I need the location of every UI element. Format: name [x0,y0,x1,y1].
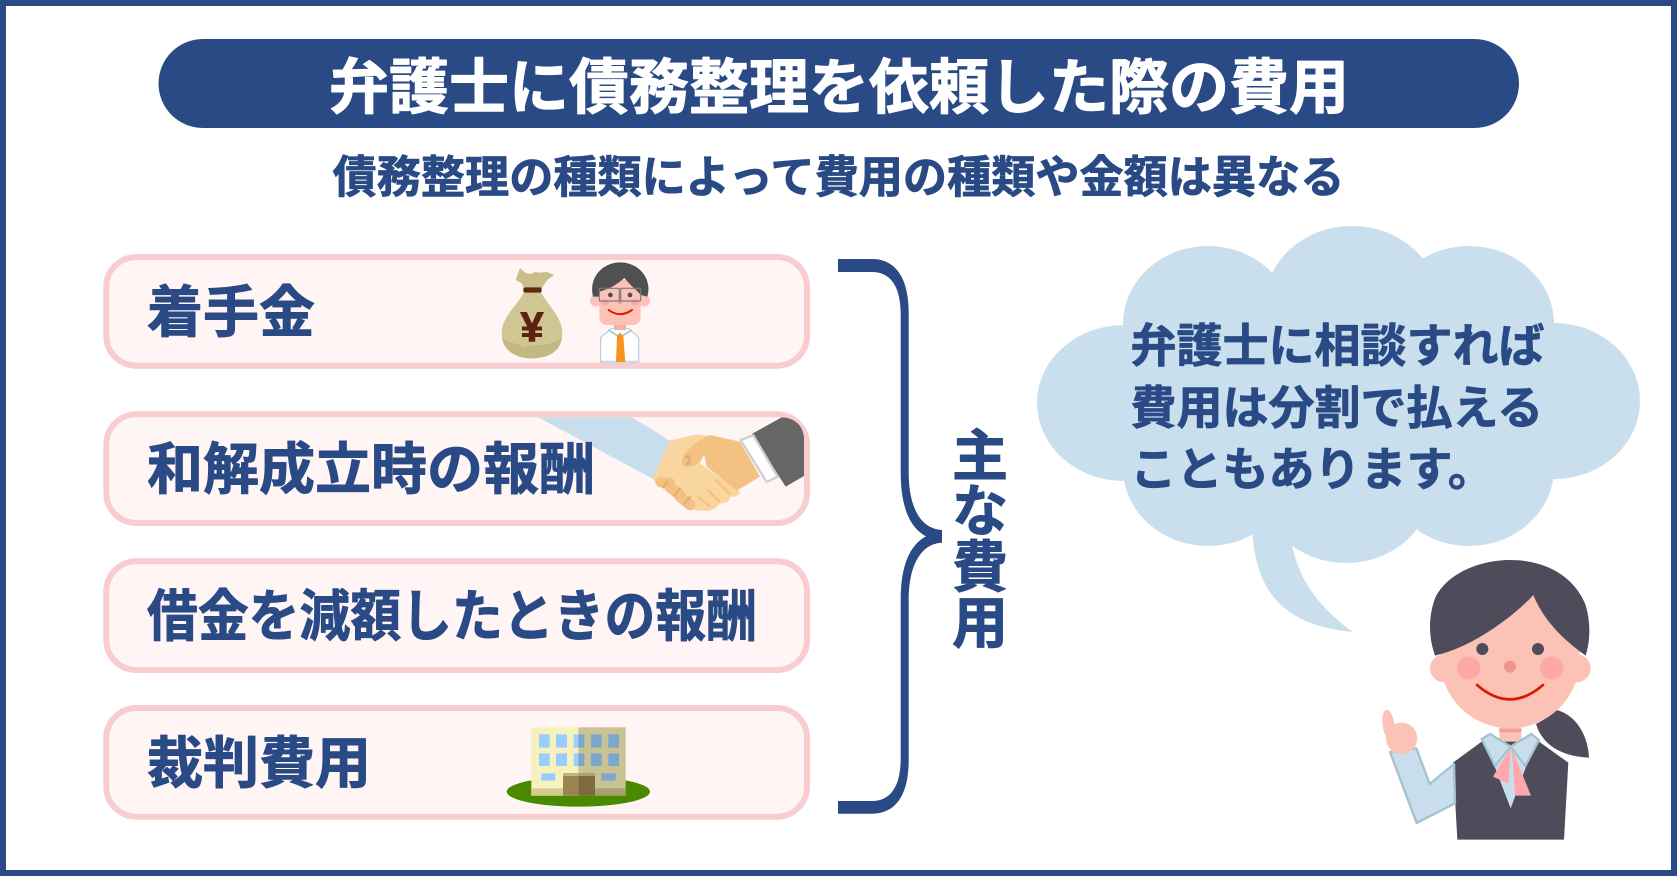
vertical label: main costs: 主 [952,425,1008,488]
icon: courthouse building [507,727,650,807]
vertical label: main costs [952,425,1008,655]
speech cloud [1037,226,1640,632]
title banner [158,39,1519,128]
title banner: 弁護士に債務整理を依頼した際の費用 [329,54,1349,122]
panel: settlement reward [106,414,807,523]
panel: court costs [106,708,807,817]
panel: retainer fee [106,257,807,366]
icon: handshake [538,417,804,511]
label: settlement reward: 和解成立時の報酬 [147,438,595,501]
subtitle: 債務整理の種類によって費用の種類や金額は異なる [333,154,1344,202]
panel: debt reduction reward [106,561,807,670]
speech text: 弁護士に相談すれば [1130,320,1544,372]
label: retainer fee: 着手金 [147,281,315,344]
vertical label: main costs: 用 [952,592,1008,655]
label: debt reduction reward: 借金を減額したときの報酬 [147,587,757,649]
vertical label: main costs: な [952,480,1008,543]
icon: lawyer man [590,262,650,363]
speech text [1130,320,1544,496]
icon: money bag: ¥ [520,305,543,351]
curly brace [838,259,942,814]
label: court costs: 裁判費用 [147,732,371,795]
icon: money bag [502,268,562,358]
vertical label: main costs: 費 [952,536,1008,599]
illustration: woman adviser [1381,560,1591,840]
speech text: こともあります。 [1130,444,1494,496]
speech text: 費用は分割で払える [1130,382,1543,434]
